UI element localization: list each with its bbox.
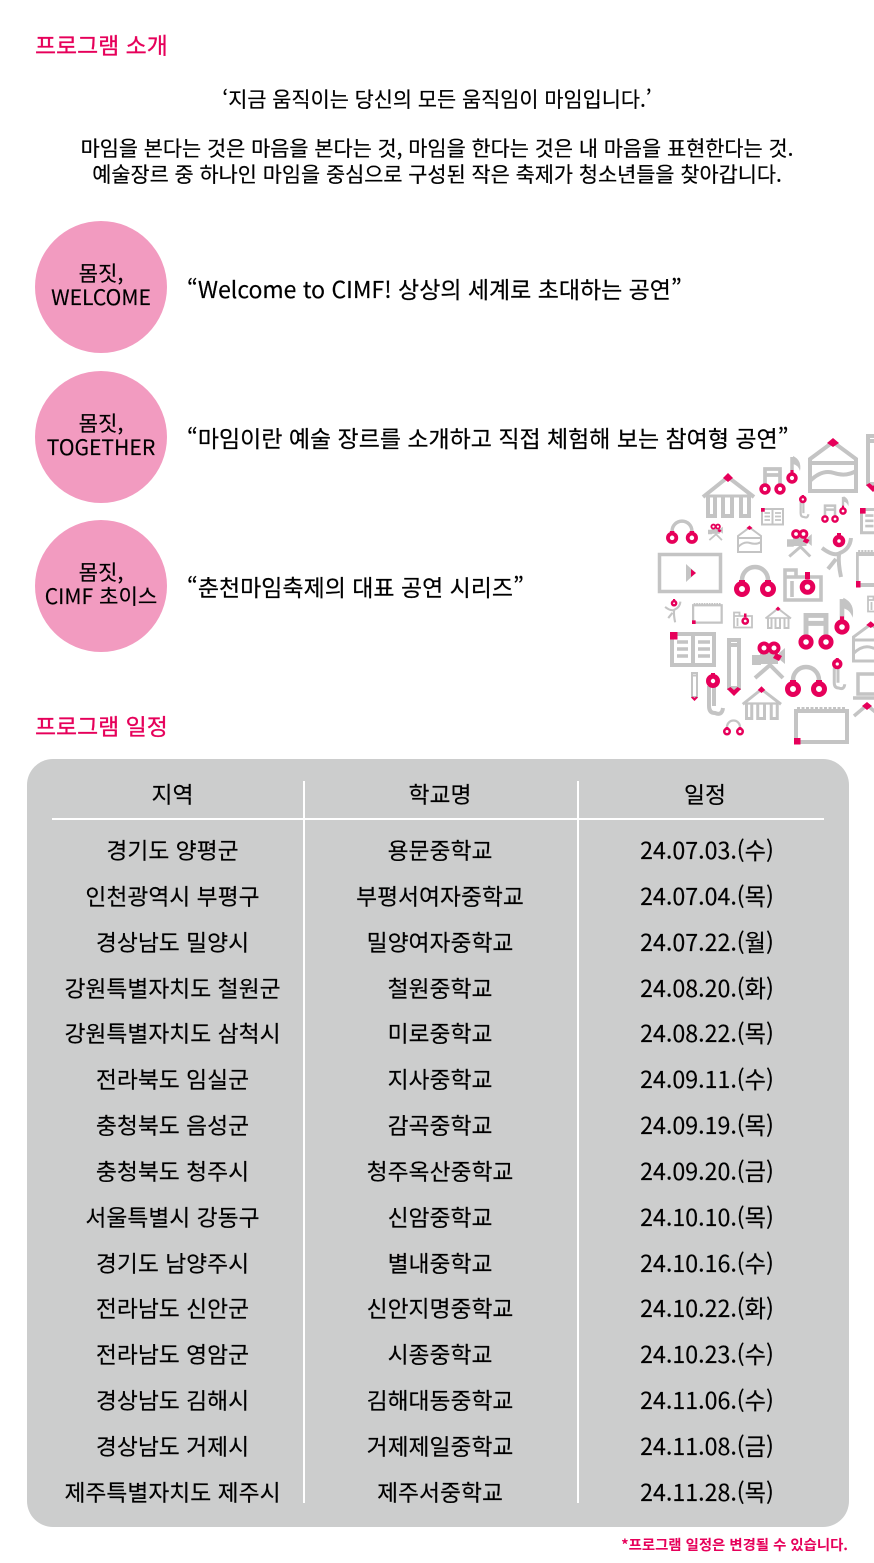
row 15 xyxy=(64,1474,774,1508)
row 8 xyxy=(96,1153,774,1187)
table header row: 지역 xyxy=(152,777,193,810)
row 5 xyxy=(64,1015,774,1049)
row 9: 24.10.10.(목) xyxy=(640,1199,774,1233)
badge: 몸짓 CIMF 초이스 xyxy=(35,520,167,652)
row 3: 경상남도 밀양시 xyxy=(96,925,249,958)
row 6 xyxy=(96,1061,774,1095)
footnote: *프로그램 일정은 변경될 수 있습니다. xyxy=(621,1534,848,1555)
table grid lines xyxy=(52,781,824,1503)
row 4 xyxy=(64,970,774,1004)
row 14 xyxy=(96,1428,774,1462)
icon: small book xyxy=(761,508,783,524)
row 1 xyxy=(106,832,774,866)
icon: tiny headphones xyxy=(724,720,743,734)
row 10: 별내중학교 xyxy=(388,1246,492,1279)
badge: 몸짓 TOGETHER xyxy=(35,371,167,503)
icon: house medium xyxy=(743,686,781,718)
badge: 몸짓 WELCOME xyxy=(35,221,167,353)
intro text block: 예술장르 중 하나인 마임을 중심으로 구성된 작은 축제가 청소년들을 찾아갑니다. xyxy=(92,158,782,188)
row 10: 경기도 남양주시 xyxy=(96,1246,249,1279)
icon: large book xyxy=(670,632,714,665)
row 6: 전라북도 임실군 xyxy=(96,1062,249,1095)
row 9: 신암중학교 xyxy=(388,1200,492,1233)
row 12: 시종중학교 xyxy=(388,1337,492,1370)
row 15: 제주서중학교 xyxy=(377,1475,503,1508)
icon: envelope house right edge xyxy=(854,621,874,661)
intro text block: ‘지금 움직이는 당신의 모든 움직임이 마임입니다.’ xyxy=(222,83,652,113)
icon: small pencil xyxy=(691,673,698,701)
icon: clip right xyxy=(834,658,845,689)
row 2 xyxy=(85,878,774,912)
icon: dancer xyxy=(822,533,851,577)
icon: small single note xyxy=(840,496,849,514)
icon: envelope house large xyxy=(810,438,856,491)
description: CIMF 초이스: “춘천마임축제의 대표 공연 시리즈” xyxy=(187,569,524,603)
row 8: 청주옥산중학교 xyxy=(367,1154,513,1187)
badge: 몸짓 CIMF 초이스: 몸짓, xyxy=(79,557,123,587)
heading: program introduction: 프로그램 소개 xyxy=(35,27,168,61)
row 10: 24.10.16.(수) xyxy=(640,1245,774,1279)
icon: small house xyxy=(766,606,791,628)
icon: small photo camera xyxy=(734,612,752,628)
badge: 몸짓 TOGETHER: 몸짓, xyxy=(79,408,123,438)
row 15: 24.11.28.(목) xyxy=(640,1474,774,1508)
icon: notepad large xyxy=(794,709,847,744)
row 10 xyxy=(96,1245,774,1279)
icon: large pencil xyxy=(727,640,741,696)
row 7: 감곡중학교 xyxy=(388,1108,492,1141)
table header row xyxy=(152,777,726,810)
intro text block xyxy=(81,83,793,188)
row 14: 거제제일중학교 xyxy=(367,1429,513,1462)
row 7: 충청북도 음성군 xyxy=(96,1108,249,1141)
icon: small dancer xyxy=(665,599,680,622)
row 4: 24.08.20.(화) xyxy=(640,970,774,1004)
row 4: 철원중학교 xyxy=(388,971,492,1004)
icon: large double note xyxy=(801,615,831,647)
icon: small envelope house xyxy=(738,526,761,552)
icon: photo camera xyxy=(785,570,821,600)
icon: large clip xyxy=(708,673,723,714)
icon: roof right edge xyxy=(854,702,874,716)
row 13 xyxy=(96,1382,774,1416)
row 11 xyxy=(96,1290,774,1324)
row 2: 부평서여자중학교 xyxy=(356,879,524,912)
icon: notepad small xyxy=(692,604,722,624)
icon: book right edge xyxy=(860,508,874,533)
icon: camera right edge xyxy=(868,596,874,612)
icon: double note xyxy=(761,469,784,493)
row 13: 24.11.06.(수) xyxy=(640,1382,774,1416)
row 7 xyxy=(96,1107,774,1141)
badge: 몸짓 CIMF 초이스: CIMF 초이스 xyxy=(45,581,157,611)
row 14: 24.11.08.(금) xyxy=(640,1428,774,1462)
table header row: 일정 xyxy=(684,777,726,810)
badge: 몸짓 WELCOME: 몸짓, xyxy=(79,258,123,288)
icon: large single note xyxy=(837,598,853,632)
icon: notepad right edge xyxy=(856,552,874,588)
row 13: 김해대동중학교 xyxy=(367,1383,513,1416)
row 12 xyxy=(96,1336,774,1370)
badge: 몸짓 WELCOME: WELCOME xyxy=(51,282,151,312)
row 12: 24.10.23.(수) xyxy=(640,1336,774,1370)
icon cluster: arts and education pictograms xyxy=(658,434,874,744)
badge: 몸짓 TOGETHER: TOGETHER xyxy=(47,432,155,462)
schedule table xyxy=(27,759,849,1527)
row 14: 경상남도 거제시 xyxy=(96,1429,249,1462)
row 11: 전라남도 신안군 xyxy=(96,1291,249,1324)
row 8: 충청북도 청주시 xyxy=(96,1154,249,1187)
icon: tiny movie camera xyxy=(708,525,723,540)
row 1: 용문중학교 xyxy=(388,833,492,866)
row 3: 24.07.22.(월) xyxy=(640,924,774,958)
row 13: 경상남도 김해시 xyxy=(96,1383,249,1416)
row 4: 강원특별자치도 철원군 xyxy=(64,971,281,1004)
icon: small clip xyxy=(800,495,808,517)
icon: video player xyxy=(660,554,720,592)
row 5: 24.08.22.(목) xyxy=(640,1015,774,1049)
row 7: 24.09.19.(목) xyxy=(640,1107,774,1141)
icon: house with columns xyxy=(703,473,754,516)
description: WELCOME: “Welcome to CIMF! 상상의 세계로 초대하는 공연” xyxy=(187,271,682,305)
description: TOGETHER: “마임이란 예술 장르를 소개하고 직접 체험해 보는 참여형 공연” xyxy=(187,420,789,454)
row 2: 24.07.04.(목) xyxy=(640,878,774,912)
intro text block: 마임을 본다는 것은 마음을 본다는 것, 마임을 한다는 것은 내 마음을 표현한다는 것. xyxy=(81,132,793,162)
icon: small double note xyxy=(822,506,838,522)
icon: headphones large xyxy=(736,567,774,594)
row 15: 제주특별자치도 제주시 xyxy=(64,1475,281,1508)
row 9 xyxy=(85,1199,774,1233)
icon: pencil upper right xyxy=(866,436,874,492)
table header row: 학교명 xyxy=(409,777,471,810)
row 12: 전라남도 영암군 xyxy=(96,1337,249,1370)
row 11: 신안지명중학교 xyxy=(367,1291,513,1324)
row 1: 24.07.03.(수) xyxy=(640,832,774,866)
icon: large movie camera xyxy=(752,644,785,678)
row 6: 24.09.11.(수) xyxy=(640,1061,774,1095)
icon: movie camera medium xyxy=(787,531,812,556)
row 1: 경기도 양평군 xyxy=(106,833,239,866)
row 5: 미로중학교 xyxy=(388,1016,492,1049)
row 5: 강원특별자치도 삼척시 xyxy=(64,1016,281,1049)
icon: laptop right edge xyxy=(853,674,874,698)
heading: program schedule: 프로그램 일정 xyxy=(35,708,168,742)
row 11: 24.10.22.(화) xyxy=(640,1290,774,1324)
row 6: 지사중학교 xyxy=(388,1062,492,1095)
row 3 xyxy=(96,924,774,958)
icon: headphones medium xyxy=(788,667,824,694)
icon: small headphones xyxy=(668,521,696,542)
row 2: 인천광역시 부평구 xyxy=(85,879,260,912)
row 9: 서울특별시 강동구 xyxy=(85,1200,260,1233)
icon: single note xyxy=(788,456,800,482)
row 3: 밀양여자중학교 xyxy=(367,925,513,958)
row 8: 24.09.20.(금) xyxy=(640,1153,774,1187)
